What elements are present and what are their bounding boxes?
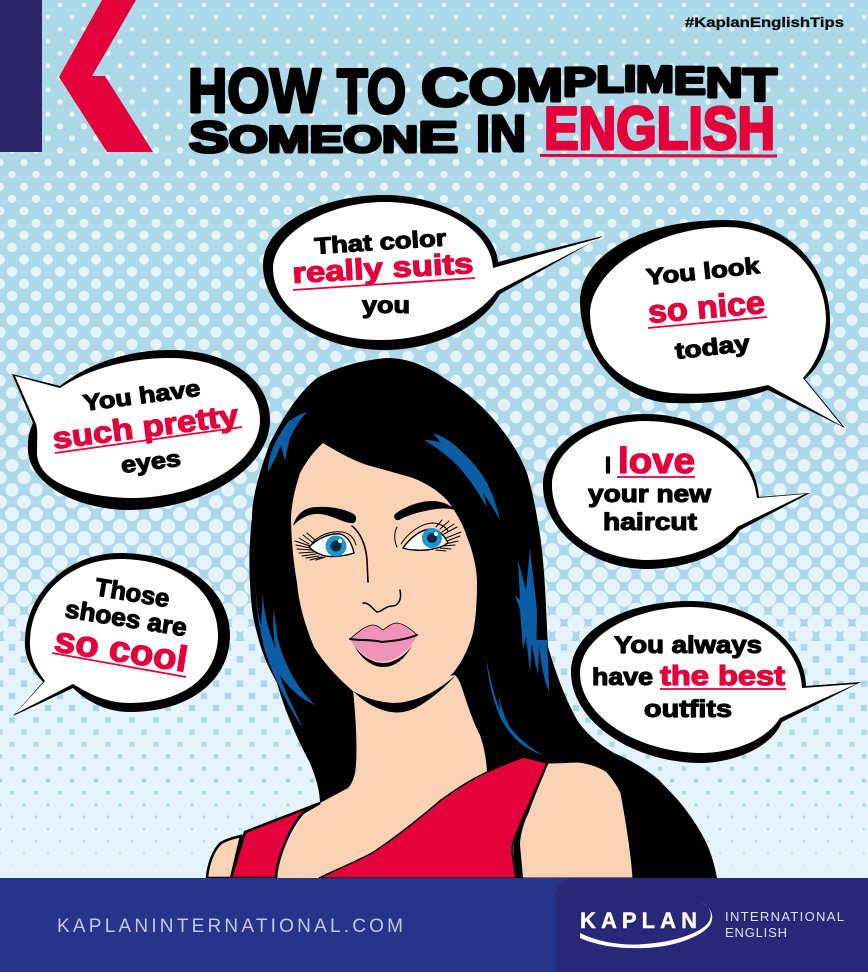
speech bubble: you look so nice today: today (674, 330, 751, 364)
footer bar (0, 878, 868, 972)
dress main panel (319, 757, 547, 878)
left eye (295, 532, 356, 560)
title (188, 57, 777, 162)
nose (352, 526, 401, 612)
face (291, 443, 477, 703)
speech bubble: I love your new haircut: I (605, 452, 611, 478)
speech bubble: I love your new haircut: love (618, 440, 695, 481)
icon: red Kaplan K chevron (59, 0, 153, 152)
speech bubble: those shoes are so cool (13, 553, 230, 716)
title line one: L (596, 59, 624, 100)
eyebrows (293, 501, 456, 526)
speech bubble: those shoes are so cool: shoes are (63, 595, 189, 642)
speech bubble: I love your new haircut: your new (588, 481, 711, 508)
title line one: N (706, 59, 743, 106)
title line one: M (636, 59, 674, 100)
title line one: E (674, 60, 706, 103)
logo panel (556, 878, 868, 972)
speech bubble: you have such pretty eyes: such pretty (51, 399, 241, 456)
title line two: S OMEON E (189, 113, 458, 162)
speech bubble: you have such pretty eyes (12, 350, 270, 510)
speech bubble: you have such pretty eyes: You have (81, 375, 202, 416)
speech bubble: that color really suits you (263, 195, 603, 350)
navy corner block (0, 0, 42, 152)
speech bubble: you always have the best outfits: the best (660, 660, 785, 691)
hair highlights (255, 412, 549, 755)
speech bubble: you have such pretty eyes: eyes (119, 445, 182, 478)
title line one: HOW (188, 57, 321, 126)
lips (350, 623, 417, 667)
hashtag: #KaplanEnglishTips (685, 14, 844, 30)
logo: Kaplan International English: INTERNATIONAL (725, 909, 844, 924)
title line one: O (469, 59, 516, 115)
speech bubble: those shoes are so cool: so cool (52, 618, 191, 680)
neck (276, 675, 520, 878)
chin shadow (353, 675, 456, 712)
title line two (189, 95, 777, 162)
website address: KAPLANINTERNATIONAL.COM (57, 916, 403, 937)
title line one (188, 57, 777, 127)
speech bubble: you always have the best outfits (571, 601, 861, 763)
title line one: T (743, 59, 777, 111)
dress left panel (231, 803, 320, 878)
title line two: ENGLISH (544, 95, 775, 162)
logo: Kaplan International English: KAPLAN (580, 908, 697, 933)
title line one: I (624, 58, 636, 99)
logo: Kaplan International English: ENGLISH (725, 925, 787, 940)
speech bubble: I love your new haircut: haircut (603, 509, 697, 536)
illustration: woman with long black hair (207, 358, 717, 878)
logo: Kaplan International English (580, 902, 844, 948)
speech bubble: you always have the best outfits: You always (614, 632, 762, 659)
speech bubble: that color really suits you: really suits (292, 248, 474, 290)
title line one: P (563, 59, 596, 105)
right shoulder (519, 762, 633, 878)
speech bubble: you look so nice today: so nice (646, 284, 766, 330)
speech bubble: you always have the best outfits: have (592, 664, 653, 691)
speech bubble: I love your new haircut (543, 414, 810, 569)
speech bubble: that color really suits you: That color (314, 225, 447, 259)
title line two: IN (476, 105, 526, 162)
left shoulder (207, 836, 241, 878)
speech bubble: those shoes are so cool: Those (93, 573, 172, 613)
speech bubble: you always have the best outfits: outfits (644, 696, 732, 723)
speech bubble: that color really suits you: you (362, 292, 410, 318)
title line one: TO (337, 57, 406, 127)
hair silhouette (249, 358, 717, 878)
title line one: M (516, 59, 563, 111)
title line one: C (421, 58, 469, 118)
speech bubble: you look so nice today (580, 220, 845, 428)
right eye (401, 520, 461, 551)
speech bubble: you look so nice today: You look (645, 252, 761, 290)
